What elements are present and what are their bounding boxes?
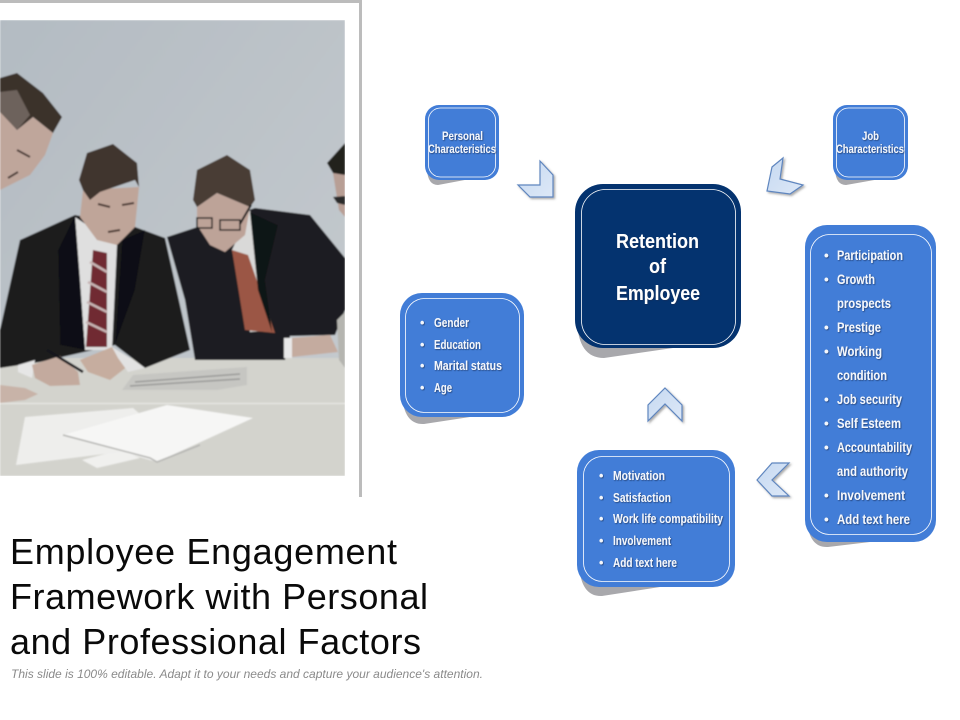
box: personal characteristics list: Gender: [434, 316, 469, 330]
photo: four businessmen at a table: [0, 20, 345, 476]
box: engagement list: Involvement: [613, 534, 672, 548]
box: job characteristics: Characteristics: [836, 144, 904, 156]
right man hand: [292, 335, 338, 357]
box: job characteristics list: and authority: [837, 464, 908, 479]
arrow: personal to center: [518, 161, 553, 197]
arrow: right box to bottom box: [757, 463, 789, 496]
box: job characteristics list: •: [824, 488, 829, 503]
box: engagement list: Work life compatibility: [613, 512, 723, 526]
box: job characteristics list: •: [824, 512, 829, 527]
center man head: [80, 187, 139, 245]
box: job characteristics list: [805, 225, 936, 542]
box: job characteristics list: Involvement: [837, 488, 905, 503]
box: job characteristics list: Prestige: [837, 320, 881, 335]
box: retention of employee: [575, 184, 741, 348]
box: job characteristics list: Growth: [837, 272, 875, 287]
hands and cuffs: [18, 360, 35, 378]
box: job characteristics list: Add text here: [837, 512, 910, 527]
title: Employee Engagement: [10, 531, 397, 572]
box: personal characteristics: [425, 105, 499, 180]
box: job characteristics list: •: [824, 392, 829, 407]
box: engagement list: Motivation: [613, 469, 665, 483]
shadow: job characteristics: [835, 170, 880, 185]
box: retention of employee: of: [649, 256, 666, 278]
box: job characteristics list: •: [824, 440, 829, 455]
box: personal characteristics list: Education: [434, 338, 481, 352]
box: personal characteristics list: •: [420, 316, 424, 330]
box: personal characteristics: Characteristics: [428, 144, 496, 156]
box: personal characteristics list: Marital status: [434, 359, 502, 373]
box: job characteristics list: prospects: [837, 296, 891, 311]
documents: [122, 367, 247, 390]
box: engagement list: Add text here: [613, 556, 677, 570]
box: job characteristics list: Working: [837, 344, 882, 359]
shadow: personal characteristics: [427, 170, 470, 185]
shadow: center box: [577, 320, 673, 358]
box: personal characteristics list: •: [420, 338, 424, 352]
box: job characteristics list: Job security: [837, 392, 902, 407]
box: job characteristics list: Participation: [837, 248, 903, 263]
right man suit: [167, 208, 345, 360]
box: personal characteristics: Personal: [442, 131, 483, 143]
box: job characteristics list: •: [824, 320, 829, 335]
shadow: personal list box: [402, 395, 470, 424]
box: job characteristics list: •: [824, 416, 829, 431]
box: job characteristics list: Self Esteem: [837, 416, 901, 431]
title: [10, 531, 428, 662]
photo frame: [0, 0, 362, 497]
box: engagement list: Satisfaction: [613, 491, 671, 505]
box: personal characteristics list: [400, 293, 524, 417]
arrow: job to center: [767, 158, 803, 194]
box: job characteristics: [833, 105, 908, 180]
left man: [0, 110, 53, 190]
box: personal characteristics list: •: [420, 381, 424, 395]
box: job characteristics list: •: [824, 344, 829, 359]
box: engagement list: •: [599, 556, 603, 570]
right edge man: [333, 170, 345, 217]
box: job characteristics list: condition: [837, 368, 887, 383]
box: engagement list: •: [599, 512, 603, 526]
box: personal characteristics list: Age: [434, 381, 452, 395]
subtitle: This slide is 100% editable. Adapt it to your needs and capture your audience's attention.: [11, 667, 483, 681]
box: engagement list: •: [599, 491, 603, 505]
box: retention of employee: Employee: [616, 283, 700, 305]
box: retention of employee: Retention: [616, 231, 699, 253]
right man head: [197, 193, 250, 252]
box: engagement list: •: [599, 534, 603, 548]
shadow: bottom list box: [579, 565, 660, 596]
box: personal characteristics list: •: [420, 359, 424, 373]
arrow: bottom box up to center: [648, 388, 682, 421]
box: job characteristics: Job: [862, 131, 879, 143]
box: job characteristics list: Accountability: [837, 440, 912, 455]
box: job characteristics list: •: [824, 248, 829, 263]
center man suit: [0, 215, 190, 368]
title: Framework with Personal: [10, 576, 428, 617]
box: job characteristics list: •: [824, 272, 829, 287]
box: engagement list: •: [599, 469, 603, 483]
box: engagement list: [577, 450, 735, 587]
table: [0, 358, 345, 476]
title: and Professional Factors: [10, 621, 421, 662]
shadow: right list box: [807, 520, 870, 547]
